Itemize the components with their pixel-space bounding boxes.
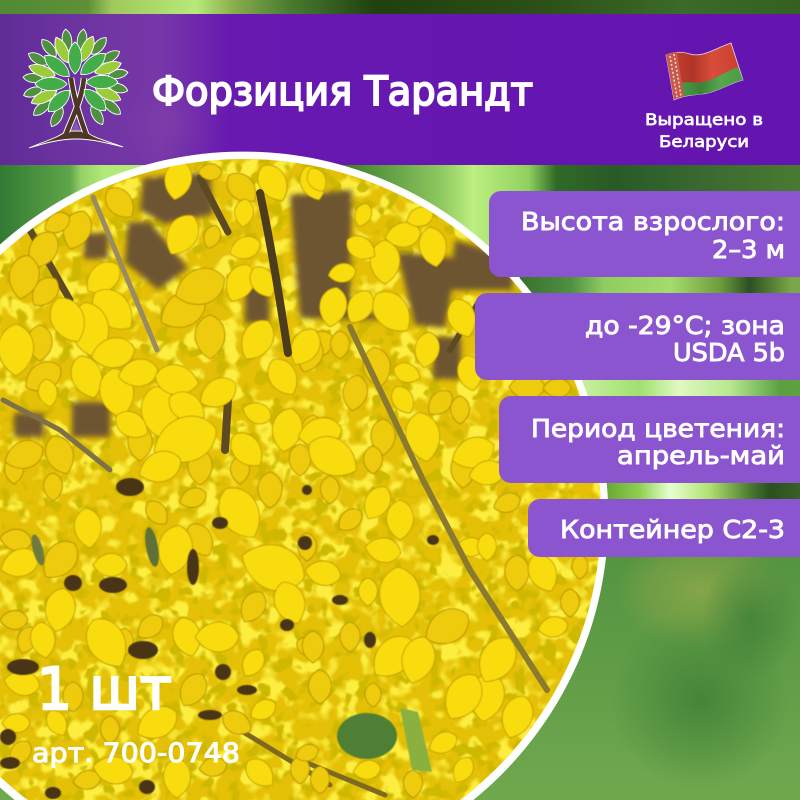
bright green big leaves	[35, 42, 118, 116]
flag caption: Выращено в	[645, 110, 763, 129]
panel: container	[528, 499, 800, 557]
quantity label: 1 шт	[37, 655, 172, 723]
panel: mature height: Высота взрослого:	[521, 207, 785, 236]
panel: hardiness: до -29°С; зона	[585, 311, 785, 340]
panel: container: Контейнер С2-3	[560, 515, 785, 544]
branches over the flowers	[260, 193, 547, 690]
flag caption	[645, 110, 763, 151]
panel: mature height: 2–3 м	[712, 235, 785, 264]
panel: hardiness	[475, 293, 800, 380]
icon: flag of Belarus	[666, 43, 743, 100]
panel: flowering period	[499, 396, 800, 483]
flag caption: Беларуси	[659, 132, 749, 151]
light green middle leaves	[27, 34, 123, 108]
panel: flowering period: апрель-май	[617, 441, 785, 470]
article number: арт. 700-0748	[32, 738, 240, 769]
logo: tree with leaves	[22, 28, 129, 148]
circular photo: yellow forsythia flowers	[0, 150, 610, 800]
green gaps and dark specks between flowers	[0, 478, 439, 799]
panel: flowering period: Период цветения:	[531, 414, 785, 443]
panel: mature height	[489, 191, 800, 277]
panel: hardiness: USDA 5b	[673, 338, 785, 367]
title: Форзиция Тарандт	[152, 69, 533, 115]
flower petals: bright layer	[0, 158, 570, 798]
white circle frame	[0, 152, 608, 800]
tree trunk and roots	[29, 78, 123, 148]
dark green outer leaves	[22, 28, 129, 129]
flower petals: mid layer	[0, 164, 588, 798]
header band	[0, 14, 800, 165]
